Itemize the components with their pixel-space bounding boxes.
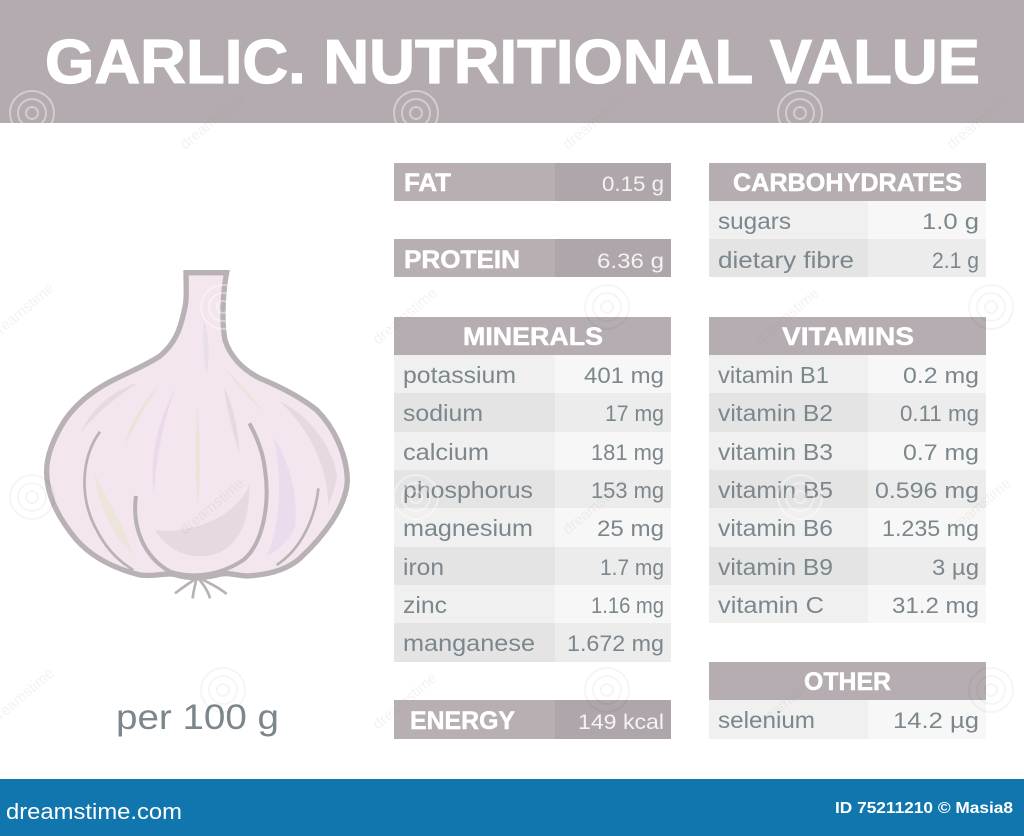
panel: energy [394, 700, 671, 739]
panel: vitamins: vitamin B1 [718, 362, 829, 388]
caption: per 100 g: per 100 g [116, 698, 279, 737]
panel: vitamins: 0.11 mg [900, 401, 979, 426]
panel: vitamins: vitamin B5 [718, 477, 833, 503]
roots [175, 578, 227, 598]
panel: vitamins: vitamin B3 [718, 439, 833, 465]
panel: fat [394, 163, 671, 201]
panel: minerals: sodium [403, 400, 483, 426]
illustration: garlic bulb [47, 273, 347, 598]
panel: vitamins: vitamin B6 [718, 515, 833, 541]
panel: vitamins: 0.2 mg [903, 363, 979, 388]
panel: vitamins: 0.7 mg [903, 440, 979, 465]
panel: vitamins: 31.2 mg [892, 593, 979, 618]
bulb shading [155, 483, 249, 556]
watermark text: dreamstime [370, 285, 441, 348]
panel: vitamins: 1.235 mg [882, 516, 979, 541]
panel: minerals: calcium [403, 439, 489, 465]
watermark spirals [10, 91, 822, 519]
panel: carbohydrates: sugars [718, 208, 791, 234]
panel: minerals [394, 317, 671, 662]
panel: vitamins: 0.596 mg [875, 478, 979, 503]
clove lines [84, 432, 133, 570]
panel: carbohydrates: 2.1 g [932, 248, 979, 273]
panel: minerals: 1.7 mg [600, 555, 664, 580]
panel: other: 14.2 µg [893, 708, 979, 733]
panel: minerals: phosphorus [403, 477, 533, 503]
panel: carbohydrates: dietary fibre [718, 247, 854, 273]
panel: minerals: 401 mg [584, 363, 664, 388]
panel: carbohydrates [709, 163, 986, 277]
panel: other: selenium [718, 707, 815, 733]
panel: fat: FAT [404, 169, 451, 197]
panel: carbohydrates: CARBOHYDRATES [733, 169, 962, 197]
watermark text: dreamstime [752, 670, 823, 733]
panel: protein: PROTEIN [404, 246, 520, 274]
watermark text: dreamstime [560, 475, 631, 538]
panel: other: OTHER [804, 668, 891, 696]
footer credit: ID 75211210 © Masia8 [835, 800, 1013, 817]
panel: fat: 0.15 g [602, 173, 664, 196]
watermark text: dreamstime [370, 670, 441, 733]
panel: minerals: 1.672 mg [567, 631, 664, 656]
panel: other [709, 662, 986, 739]
panel: minerals: potassium [403, 362, 516, 388]
panel: minerals: 181 mg [591, 440, 664, 465]
panel: protein: 6.36 g [597, 250, 664, 273]
panel: vitamins [709, 317, 986, 623]
panel: minerals: 25 mg [597, 516, 664, 541]
footer bar [0, 779, 1024, 836]
panel: minerals: zinc [403, 592, 447, 618]
watermark text: dreamstime [944, 90, 1015, 153]
panel: vitamins: vitamin B9 [718, 554, 833, 580]
panel: carbohydrates: 1.0 g [922, 209, 979, 234]
watermark text: dreamstime [752, 285, 823, 348]
faint spirals on white [10, 285, 1013, 712]
panel: energy: 149 kcal [578, 711, 664, 734]
panel: minerals: 1.16 mg [591, 593, 664, 618]
panel: vitamins: VITAMINS [782, 323, 914, 351]
panel: vitamins: vitamin C [718, 592, 824, 618]
watermark text [0, 90, 1015, 733]
panel: minerals: magnesium [403, 515, 533, 541]
panel: minerals: 17 mg [605, 401, 664, 426]
panel: vitamins: 3 µg [932, 555, 979, 580]
panel: minerals: manganese [403, 630, 535, 656]
watermark text: dreamstime [177, 90, 248, 153]
panel: minerals: iron [403, 554, 444, 580]
panel: minerals: MINERALS [463, 323, 603, 351]
panel: protein [394, 239, 671, 277]
footer logo: dreamstime.com [6, 799, 182, 824]
watermark text: dreamstime [944, 475, 1015, 538]
watermark text: dreamstime [177, 475, 248, 538]
panel: minerals: 153 mg [591, 478, 664, 503]
header band [0, 0, 1024, 123]
panel: energy: ENERGY [410, 707, 515, 735]
title: GARLIC. NUTRITIONAL VALUE [45, 28, 980, 97]
watermark text: dreamstime [560, 90, 631, 153]
panel: vitamins: vitamin B2 [718, 400, 833, 426]
